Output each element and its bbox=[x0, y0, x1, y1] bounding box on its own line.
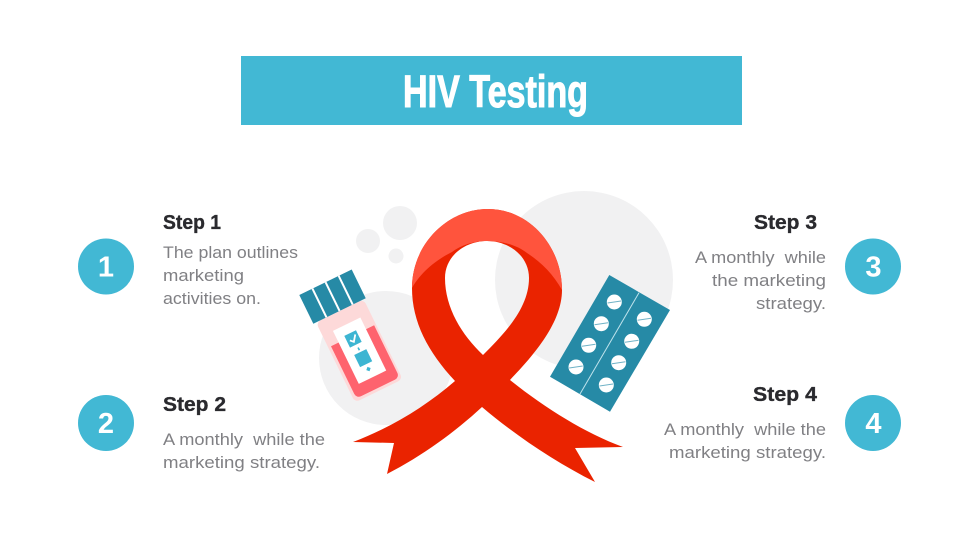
step 4: Step 4 bbox=[753, 383, 818, 406]
title banner bbox=[241, 56, 742, 125]
step 4: A monthly while the bbox=[664, 420, 826, 439]
step 2: 2 bbox=[98, 408, 114, 440]
step 1: Step 1 bbox=[163, 211, 221, 234]
step 3 bbox=[695, 211, 901, 313]
step 3: strategy. bbox=[756, 294, 826, 313]
step 2: A monthly while the bbox=[163, 430, 325, 449]
title: HIV Testing bbox=[403, 66, 588, 117]
step 3: the marketing bbox=[712, 271, 826, 290]
icon: blister pack bbox=[550, 275, 670, 412]
step 4 bbox=[664, 383, 901, 462]
step 2 bbox=[78, 393, 325, 472]
icon: medicine bottle bbox=[299, 269, 405, 404]
step 4: marketing strategy. bbox=[669, 443, 826, 462]
step 3: Step 3 bbox=[754, 211, 817, 234]
step 2: marketing strategy. bbox=[163, 453, 320, 472]
step 1: The plan outlines bbox=[163, 243, 298, 262]
icon: red awareness ribbon bbox=[353, 209, 623, 482]
step 1: marketing bbox=[163, 266, 244, 285]
step 1: activities on. bbox=[163, 289, 261, 308]
step 3: 3 bbox=[865, 252, 882, 284]
step 1 bbox=[78, 211, 298, 308]
step 2: Step 2 bbox=[163, 393, 226, 416]
background circles bbox=[319, 191, 673, 425]
step 1: 1 bbox=[98, 252, 114, 284]
step 4: 4 bbox=[865, 408, 882, 440]
step 3: A monthly while bbox=[695, 248, 826, 267]
ribbon highlight bbox=[412, 209, 562, 290]
